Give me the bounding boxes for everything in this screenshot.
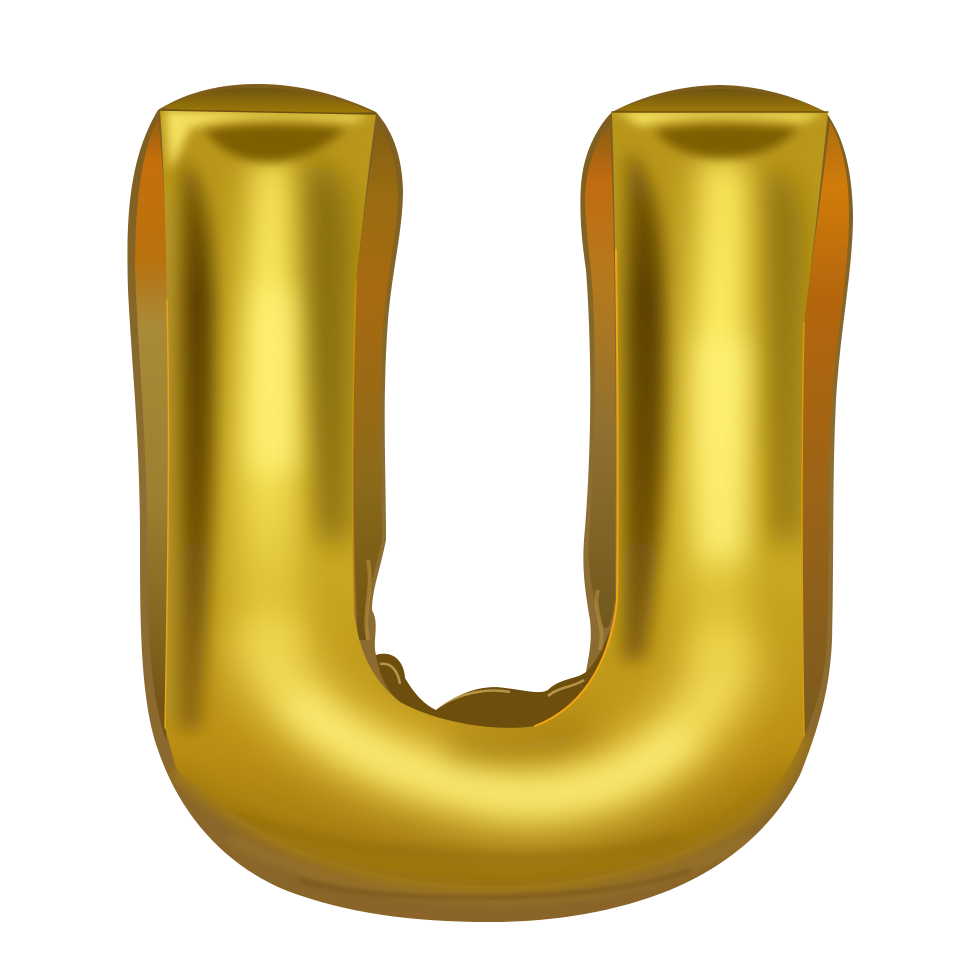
right cap shading [616,110,826,158]
left arm top dome [162,88,372,116]
shadow beneath the inner curve [450,728,590,749]
left arm dark reflection band [178,160,214,730]
inner bottom foil creases [366,560,610,730]
right arm outer side panel [801,122,849,736]
lower lobe gold blend [176,736,804,886]
left arm outer tan strip [165,202,176,720]
right arm dark reflection band [622,150,665,660]
front face of the letter [160,110,828,884]
bottom curve bright highlight [268,650,725,797]
orange seam lines [160,110,828,736]
left arm mid band [299,165,353,540]
left arm soft centre glow [252,290,294,470]
right arm soft centre glow [700,340,745,560]
left cap shading [165,110,372,170]
lower lobe shadow [180,770,786,858]
illustration: gold foil balloon letter U [127,84,853,922]
lower lobe rim [230,838,750,900]
right arm mid band [762,172,803,540]
lower lobe creases [254,820,660,860]
right arm bright highlight [687,155,752,670]
right arm top dome [616,89,824,116]
right arm inner side panel [585,125,615,628]
left arm outer side panel [135,118,170,740]
face base colour [160,110,828,878]
left arm inner side panel [353,125,398,640]
left arm bright highlight [239,155,304,650]
bottom curve core glow [300,705,680,796]
balloon silhouette [127,84,853,922]
